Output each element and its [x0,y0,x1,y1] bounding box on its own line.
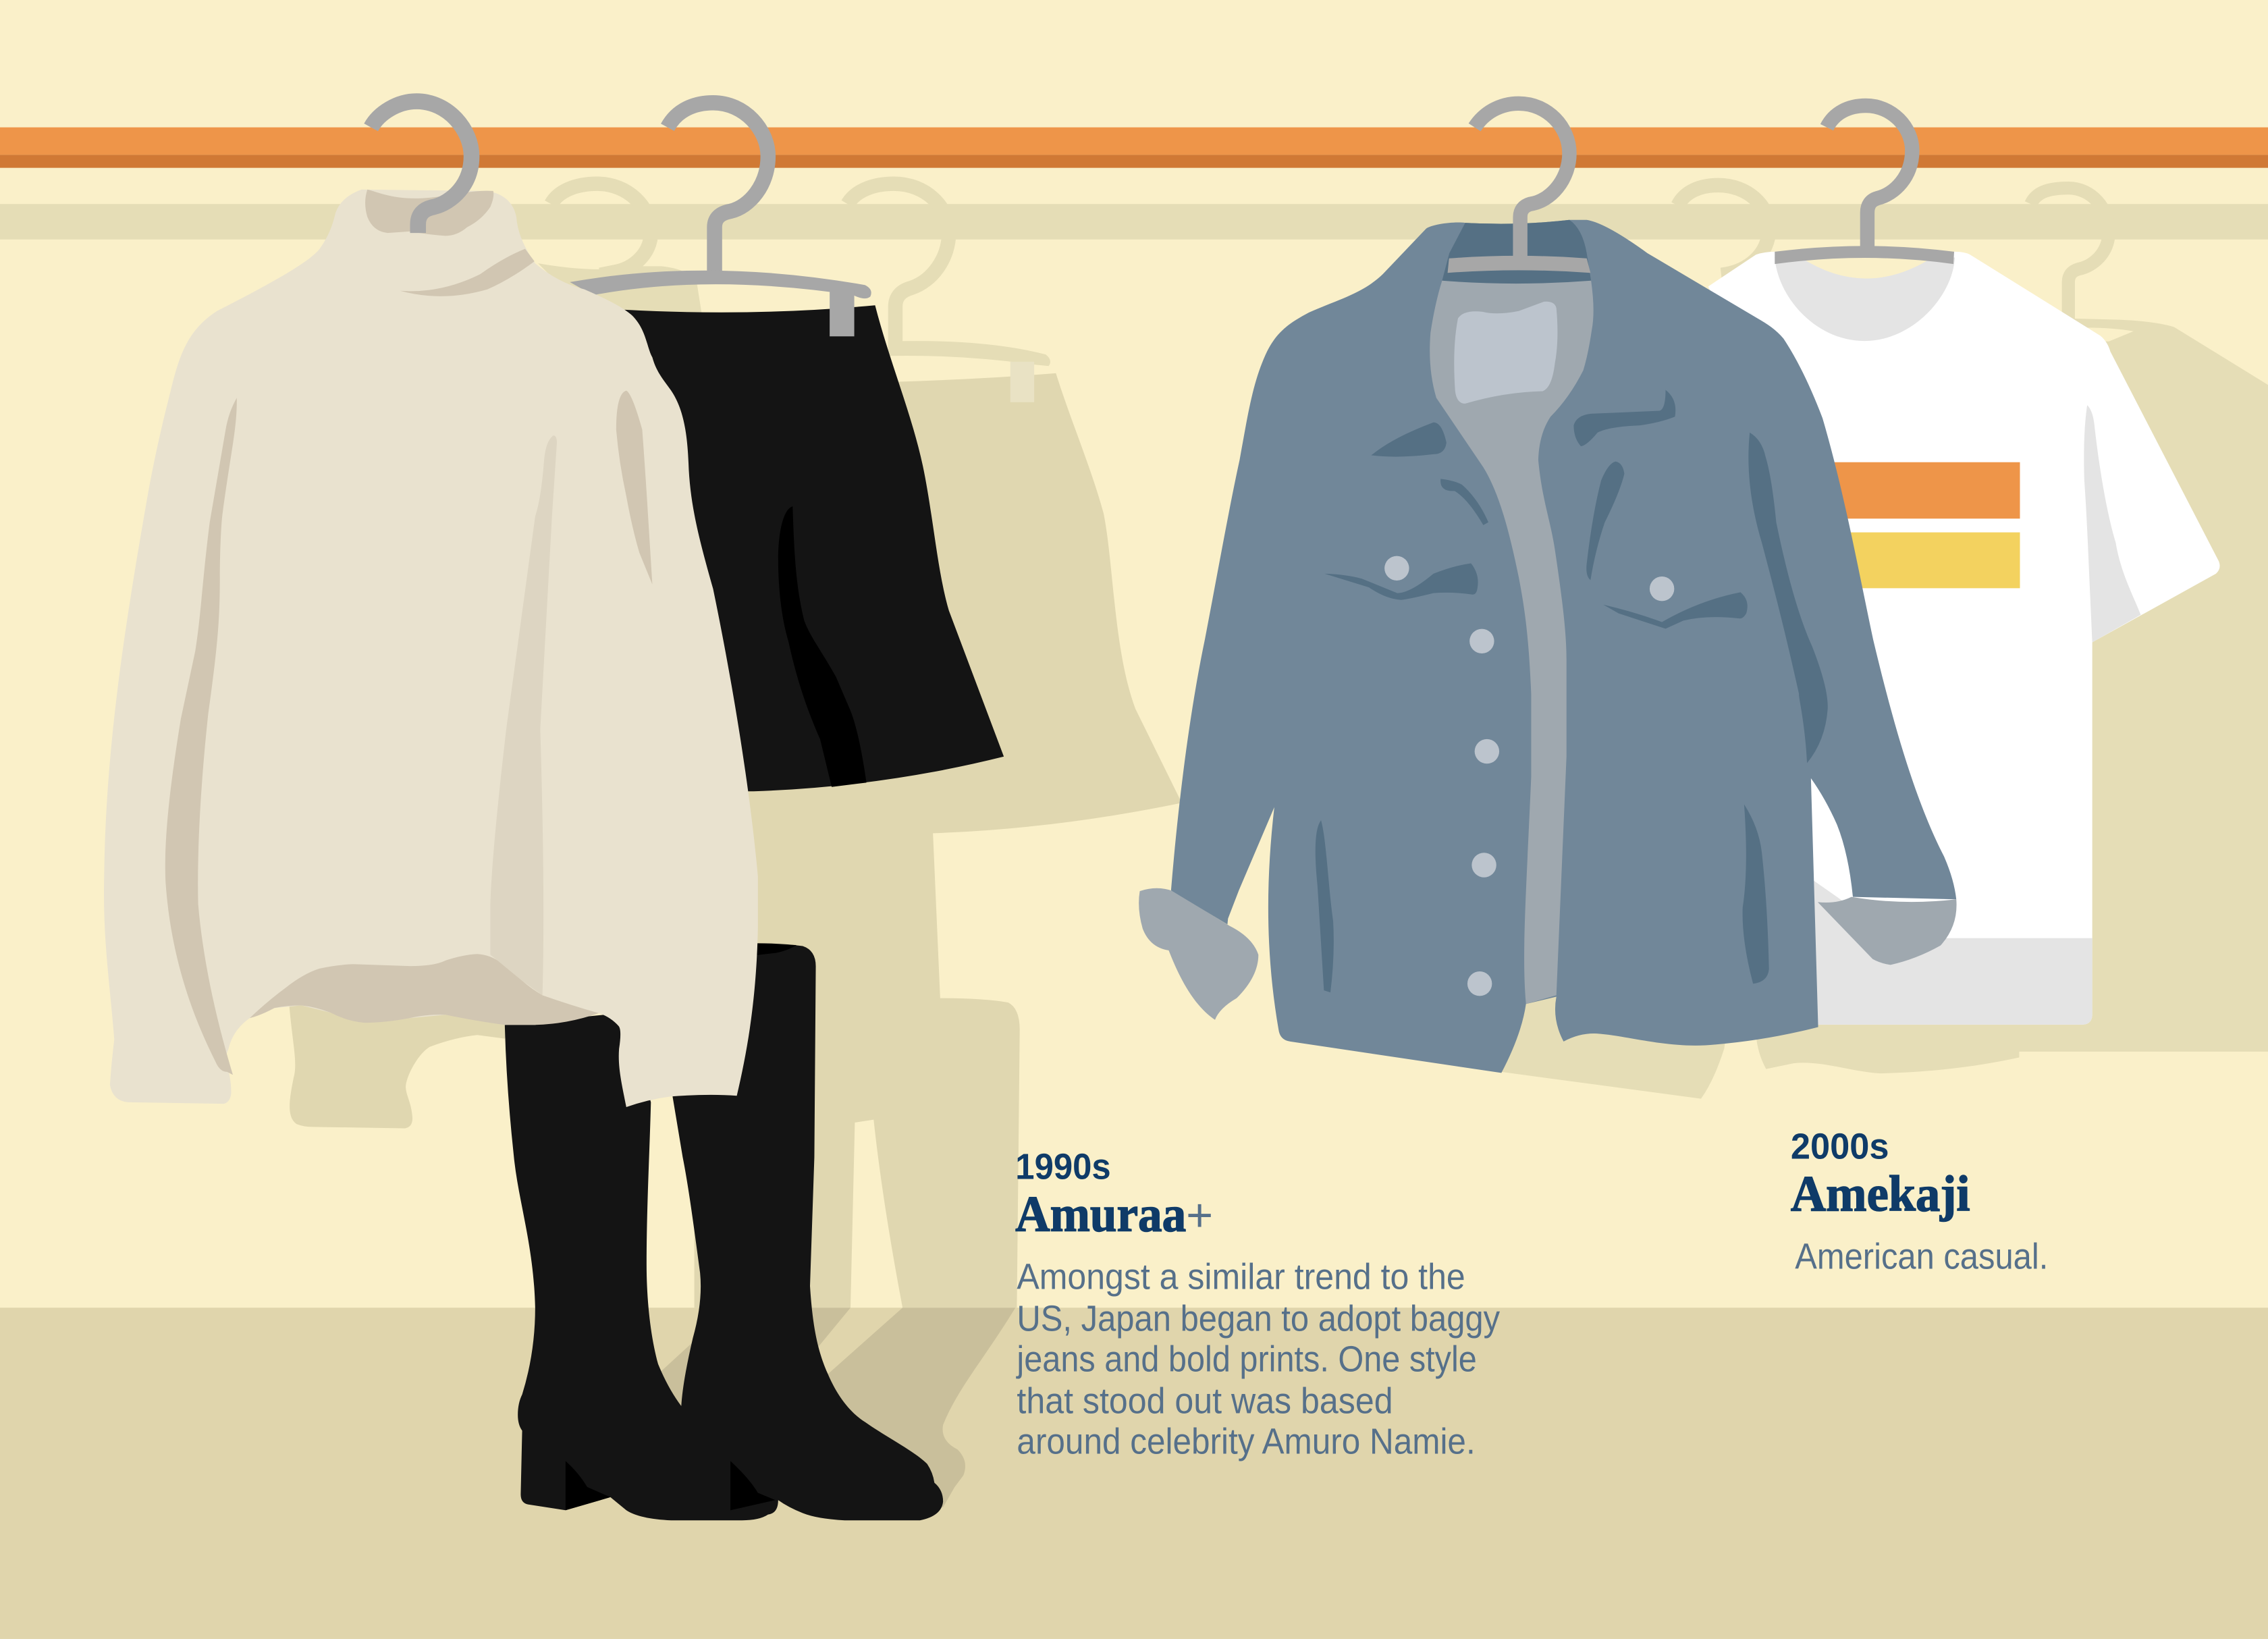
jacket right collar detail [1573,390,1675,446]
clothing rod [0,128,2268,168]
jacket left seam detail [1440,479,1488,525]
era label: 1990s: 1990s [1015,1147,1111,1187]
garment: black skirt [570,103,1004,791]
sweater hem underside [250,954,599,1025]
text block: 2000s Amekaji [1791,1127,2048,1277]
skirt fold [778,506,867,787]
jacket left cuff [1139,888,1258,1020]
left heel shade [566,1461,610,1510]
description [1016,1257,1500,1462]
sweater body [104,190,758,1107]
jacket left pocket flap [1324,563,1478,600]
jacket body [1171,220,1956,1073]
garment: cream turtleneck sweater [104,101,758,1107]
description: jeans and bold prints. One style [1016,1339,1477,1379]
jacket left collar detail [1371,423,1447,457]
right heel shade [730,1461,776,1510]
skirt body [622,305,1004,791]
jacket right pocket slit [1743,805,1769,984]
wall shadow: right outfit [1501,185,2268,1099]
shadow: t-shirt hook [2031,188,2109,321]
t-shirt body [1708,252,2220,1025]
garment: knee-high boots [505,943,943,1520]
jacket inner lining [1430,281,1594,1004]
shadow: jacket hem [1501,984,1730,1099]
shadow: t-shirt collar gap [2076,327,2134,342]
era label: 2000s: 2000s [1791,1127,1889,1166]
jacket left pocket slit [1316,820,1334,992]
shadow hanger: first hook [551,184,651,275]
jacket collar lining [1442,220,1591,290]
sweater inner arm fold [616,391,652,585]
shadow: t-shirt body [1756,319,2268,1073]
description: around celebrity Amuro Namie. [1017,1422,1476,1462]
t-shirt hanger [1775,105,1954,264]
floor shadow of boots [661,1308,1015,1507]
t-shirt hem band [1808,877,2092,1025]
description: Amongst a similar trend to the [1017,1257,1465,1297]
description: that stood out was based [1017,1382,1393,1422]
jacket hanger [1448,103,1590,273]
t-shirt neck opening [1801,258,1933,279]
sweater neck interior [365,190,493,236]
floor [0,1308,2268,1639]
plus sign: + [1186,1189,1213,1241]
style name: Amekaji: Amekaji [1791,1166,1970,1222]
boot top opening [756,944,796,955]
jacket right cuff [1818,897,1957,965]
jacket neck tag [1454,302,1557,404]
style name: Amuraa+: Amuraa [1015,1187,1186,1243]
sweater left sleeve fold [165,398,237,1075]
t-shirt collar [1775,258,1955,341]
sweater hanger hook [371,101,472,233]
jacket right sleeve fold [1748,433,1828,763]
shadow: sweater sleeve and hem [290,998,520,1129]
jacket buttons [1384,556,1674,996]
shadow hanger: second hook and bar [848,184,1050,402]
text block: 1990s Amuraa+ [1015,1148,1500,1462]
yellow stripe [1808,533,2020,588]
shadow rail [0,204,2268,240]
orange stripe [1808,462,2020,518]
sweater centre fold [490,435,557,995]
shadow: jacket hook [1678,185,1769,275]
wall shadow: left outfit [290,184,1182,1308]
shadow: skirt and boots [695,373,1182,1308]
shadow: sweater shoulder [538,263,701,333]
skirt hanger [570,103,871,336]
boots silhouette [505,943,943,1520]
description: US, Japan began to adopt baggy [1017,1299,1500,1339]
jacket right pocket flap [1603,592,1748,628]
garment: denim jacket [1139,103,1957,1073]
description: American casual. [1795,1237,2048,1277]
jacket right seam detail [1586,462,1624,580]
garment: white t-shirt [1708,105,2220,1025]
sweater collar fold [400,249,535,296]
t-shirt sleeve fold [2084,405,2140,643]
